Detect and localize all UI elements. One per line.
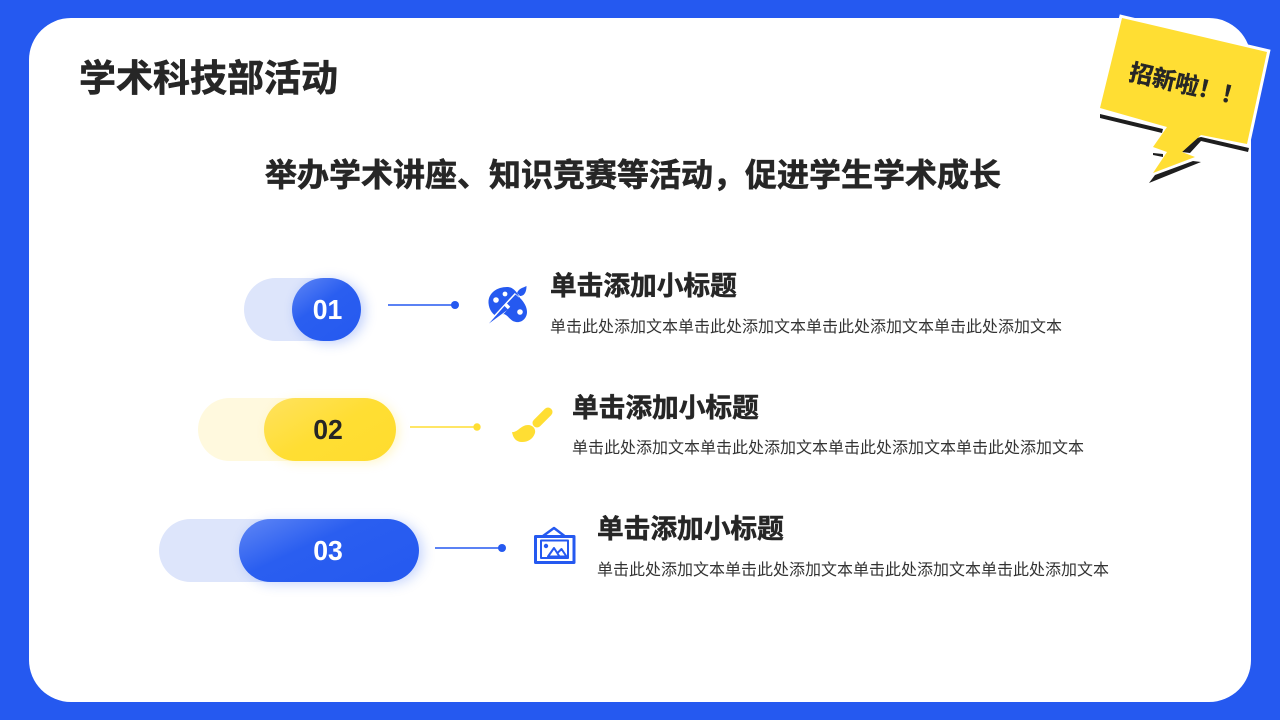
row 2 subtitle: 单击添加小标题 [572,393,759,423]
row 1 description: 单击此处添加文本单击此处添加文本单击此处添加文本单击此处添加文本 [550,319,1062,336]
row 3 pill: 03 [313,535,343,566]
row 2 description: 单击此处添加文本单击此处添加文本单击此处添加文本单击此处添加文本 [572,440,1084,457]
row 1 pill [244,274,371,349]
row 1 pill: 01 [313,294,342,325]
lead sentence: 举办学术讲座、知识竞赛等活动，促进学生学术成长 [265,157,1001,193]
row 2 text [572,393,1084,457]
speech bubble callout: 招新啦！！ [1127,58,1247,111]
row 2 pill: 02 [313,414,343,445]
row 3 pill [159,515,428,590]
row 3 connector [435,544,506,552]
row 1 text [550,271,1062,336]
icon: framed picture [534,526,576,564]
row 2 pill [198,396,404,468]
icon: paint brush [512,408,552,442]
row 1 connector [388,301,459,309]
row 3 description: 单击此处添加文本单击此处添加文本单击此处添加文本单击此处添加文本 [597,562,1109,579]
icon: palette and brush [488,286,527,324]
title: 学术科技部活动 [79,58,338,99]
row 3 subtitle: 单击添加小标题 [597,514,784,544]
row 2 connector [410,423,481,431]
row 3 text [597,514,1109,579]
row 1 subtitle: 单击添加小标题 [550,271,737,301]
